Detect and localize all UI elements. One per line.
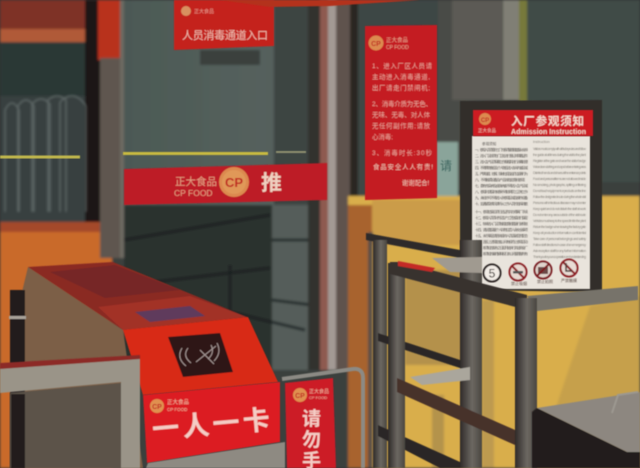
front steel frame at bottom left: [0, 355, 140, 468]
card reader: [168, 333, 233, 377]
board red header: [473, 110, 593, 136]
board rules text: 五、严禁吸烟、拍照、随地吐痰及乱扔垃圾等行为: [475, 171, 528, 176]
board rules text: Register at the gate and wear the visitor badge: [533, 159, 586, 163]
board rules text: Vehicles must keep to the speed limit in the plant: [533, 219, 586, 223]
red disinfection notice sign: [365, 25, 437, 200]
steel crossbars: [432, 257, 482, 273]
admission instruction board: [460, 100, 602, 292]
board rules text: 九、未经许可不得进入非参观区域及操作设备: [475, 195, 528, 200]
board rules text: 十四、请妥善保管个人财物,注意人身安全事项: [475, 227, 528, 232]
board red header: Admission Instruction: [511, 129, 586, 136]
window reflection: rows of hanging loops: [5, 96, 86, 212]
sign: one person one card: CP FOOD: [167, 407, 188, 412]
board rules text: 十七、本须知自发布之日起开始执行并适用全厂: [475, 245, 528, 250]
board rules text: Follow the designated route during the whole visit: [533, 195, 586, 199]
board rules text: 三、进入生产区须穿戴工作服帽并进行消毒处理: [475, 159, 528, 164]
icon: no photography: [534, 262, 552, 278]
board rules text: Instruction: [533, 140, 550, 144]
board rules text: 八、参观时请保持安静,不得妨碍员工正常工作: [475, 189, 528, 194]
red disinfection notice sign: 出厂请走门禁闸机;: [372, 83, 430, 92]
board rules text: 十三、车辆进入厂区须按规定路线限速行驶停放: [475, 221, 528, 226]
sign: personnel disinfection channel entrance: [174, 0, 274, 50]
red disinfection notice sign: 无味、无毒、对人体: [372, 110, 431, 119]
board rules text: [475, 140, 587, 259]
board rules text: 二、进入厂区前须在门卫处进行登记并佩戴证件: [475, 153, 528, 158]
sign: please do not touch: 正大食品: [309, 388, 329, 395]
yellow light strip: [0, 151, 306, 158]
red disinfection notice sign: 主动进入消毒通道,: [372, 72, 430, 81]
sign: please do not touch: CP: [295, 393, 305, 400]
banner: CP Food push sign: 正大食品: [175, 175, 217, 188]
sign: please do not touch: 请: [302, 408, 321, 430]
red disinfection notice sign: 2、消毒介质为无色、: [372, 99, 432, 108]
board rules text: Visitors must comply with all factory rules and follow: [533, 147, 586, 151]
curved handrail: [282, 369, 363, 468]
board rules text: Keep quiet and do not disturb the staff at work: [533, 207, 586, 211]
red disinfection notice sign: 食品安全人人有责!: [373, 162, 433, 171]
red disinfection notice sign: 3、消毒时长:30秒: [372, 148, 433, 157]
red disinfection notice sign: 正大食品: [386, 36, 409, 44]
board rules text: 四、不得携带食品及个人物品进入车间内部区域: [475, 165, 528, 170]
board rules text: Keep all production information confidential: [533, 231, 586, 235]
board rules text: 十二、参观人员须对所见生产工艺信息进行保密: [475, 215, 528, 220]
board rules text: 一、参观人员须遵守工厂的各项管理规定,服从安排: [475, 147, 528, 152]
board rules text: the guide at all times during the visit to the plant: [533, 153, 586, 157]
board rules text: Disinfect hands and shoes at the entrance points: [533, 171, 586, 175]
background green notice behind red sign: 请: [440, 159, 452, 173]
sign: please do not touch: [285, 378, 336, 468]
steel bin at right: [532, 392, 640, 468]
board rules text: 参观须知: [482, 141, 497, 146]
red disinfection notice sign: 谢谢配合!: [402, 178, 430, 187]
icon: no touching: [560, 260, 578, 276]
metal base under sign: [146, 442, 285, 468]
board frame: [460, 100, 602, 292]
turnstile top surface: [28, 262, 247, 330]
sign: one person one card: CP: [152, 404, 162, 411]
top red beam: [220, 0, 420, 7]
board rules text: Wear clean clothing and caps before entering area: [533, 165, 586, 169]
board rules text: Do not touch equipment or products on the line: [533, 189, 586, 193]
icon: speed limit 5: 5: [489, 266, 496, 280]
board rules text: 十五、未尽事宜请咨询接待人员,感谢您的配合: [475, 233, 528, 238]
red disinfection notice sign: 心消毒;: [372, 132, 393, 141]
red disinfection notice sign: CP: [371, 41, 381, 48]
board rules text: Ask reception staff for any further information: [533, 249, 586, 253]
board rules text: Thank you for your cooperation and understanding: [533, 255, 586, 259]
banner: CP Food push sign: CP FOOD: [174, 188, 213, 198]
sign: please do not touch: 勿: [302, 429, 321, 451]
board red header: 正大食品: [478, 127, 496, 134]
banner: CP Food push sign: CP: [225, 175, 243, 190]
board rules text: 十六、违反上述规定者,公司有权终止参观活动: [475, 239, 528, 244]
board rules text: 十八、本须知的最终解释权归本公司管理部所有: [475, 251, 528, 256]
red disinfection notice sign: CP FOOD: [386, 45, 409, 51]
board white paper: [472, 136, 590, 289]
icon captions: 禁止吸烟: [511, 280, 527, 286]
board rules text: Return the badge when leaving the factory gate: [533, 225, 586, 229]
board rules text: 七、患有传染病及皮肤病者不得进入生产区域: [475, 183, 528, 188]
sign: personnel disinfection channel entrance: 正大食品: [194, 8, 214, 15]
turnstile side panel: [22, 267, 143, 468]
sign: one person one card: [143, 382, 280, 463]
board rules text: Take care of personal belongings and safety: [533, 237, 586, 241]
banner: CP Food push sign: 推: [261, 172, 282, 195]
turnstile front face: [123, 317, 278, 395]
board rules text: 十一、参观结束后须归还证件并办理离厂手续: [475, 209, 528, 214]
turnstile gate: [9, 262, 278, 468]
board rules text: Do not enter any area outside of the visit route: [533, 213, 586, 217]
front rail frame: [388, 263, 405, 468]
board red header: CP: [481, 118, 489, 124]
board rules text: No smoking, photographs, spitting or littering: [533, 183, 586, 187]
back rail: [366, 233, 460, 258]
sign: one person one card: 正大食品: [167, 398, 190, 406]
red disinfection notice sign: 1、进入厂区人员请: [372, 61, 433, 70]
sign: please do not touch: CP FOOD: [309, 395, 327, 400]
red disinfection notice sign: 无任何副作用;请放: [372, 121, 431, 130]
board rules text: Follow staff directions in case of an emergency: [533, 243, 586, 247]
board rules text: 十、如遇紧急情况请听从工作人员的指挥疏散: [475, 201, 528, 206]
banner: CP Food push sign: [124, 163, 327, 205]
board rules text: Persons with infectious disease may not enter: [533, 201, 587, 205]
safety icons row: [484, 260, 578, 282]
icon captions: [511, 277, 577, 286]
sign: personnel disinfection channel entrance: 人员消毒通道入口: [182, 28, 268, 42]
steel railing structure: [366, 233, 638, 468]
sign: one person one card: 一人一卡: [151, 405, 271, 445]
icon captions: 禁止拍照: [537, 278, 553, 284]
board rules text: Food and personal items are not allowed inside: [533, 177, 586, 181]
board rules text: 六、不得触摸设备及产品,按指定路线参观: [475, 177, 525, 182]
board red header: 入厂参观须知: [511, 114, 584, 128]
icon: no smoking: [510, 264, 526, 280]
icon captions: 严禁触摸: [561, 277, 577, 283]
